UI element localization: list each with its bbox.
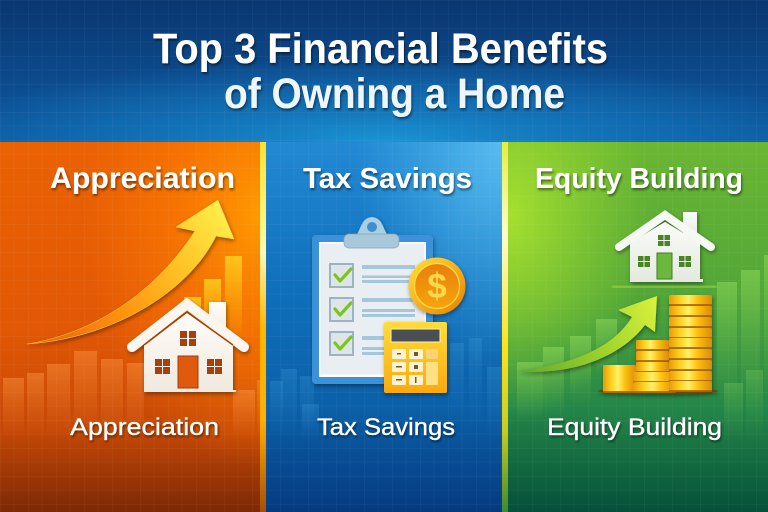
icon: house	[619, 212, 711, 282]
panel: equity building	[508, 142, 768, 512]
panel background	[508, 142, 768, 512]
heading: appreciation: Appreciation	[50, 162, 235, 195]
clip	[344, 217, 399, 248]
divider: right	[502, 142, 508, 512]
panel background	[0, 142, 260, 512]
title: of Owning a Home	[224, 70, 565, 118]
icon: rising arrow	[517, 296, 657, 372]
panel background	[266, 142, 502, 512]
heading: tax savings: Tax Savings	[303, 163, 472, 195]
panel: tax savings	[266, 142, 502, 512]
title	[153, 25, 608, 118]
heading: equity building: Equity Building	[535, 163, 743, 195]
label: appreciation: Appreciation	[70, 414, 219, 441]
icon: dollar coin: $	[427, 267, 447, 306]
title: Top 3 Financial Benefits	[153, 25, 608, 73]
background bar chart	[517, 255, 768, 443]
icon: dollar coin	[408, 258, 466, 314]
divider: left	[260, 142, 266, 512]
icon: rising arrow	[27, 200, 234, 344]
icon: coin stacks	[598, 295, 718, 394]
label: tax savings: Tax Savings	[317, 414, 455, 441]
icon: clipboard	[312, 217, 433, 384]
header panel	[0, 0, 768, 142]
checklist	[330, 264, 415, 355]
background bar chart	[270, 338, 502, 444]
icon: house	[132, 302, 244, 392]
label: equity building: Equity Building	[547, 414, 722, 441]
panel: appreciation	[0, 142, 260, 512]
background bar chart	[3, 256, 260, 438]
icon: calculator	[384, 322, 447, 393]
